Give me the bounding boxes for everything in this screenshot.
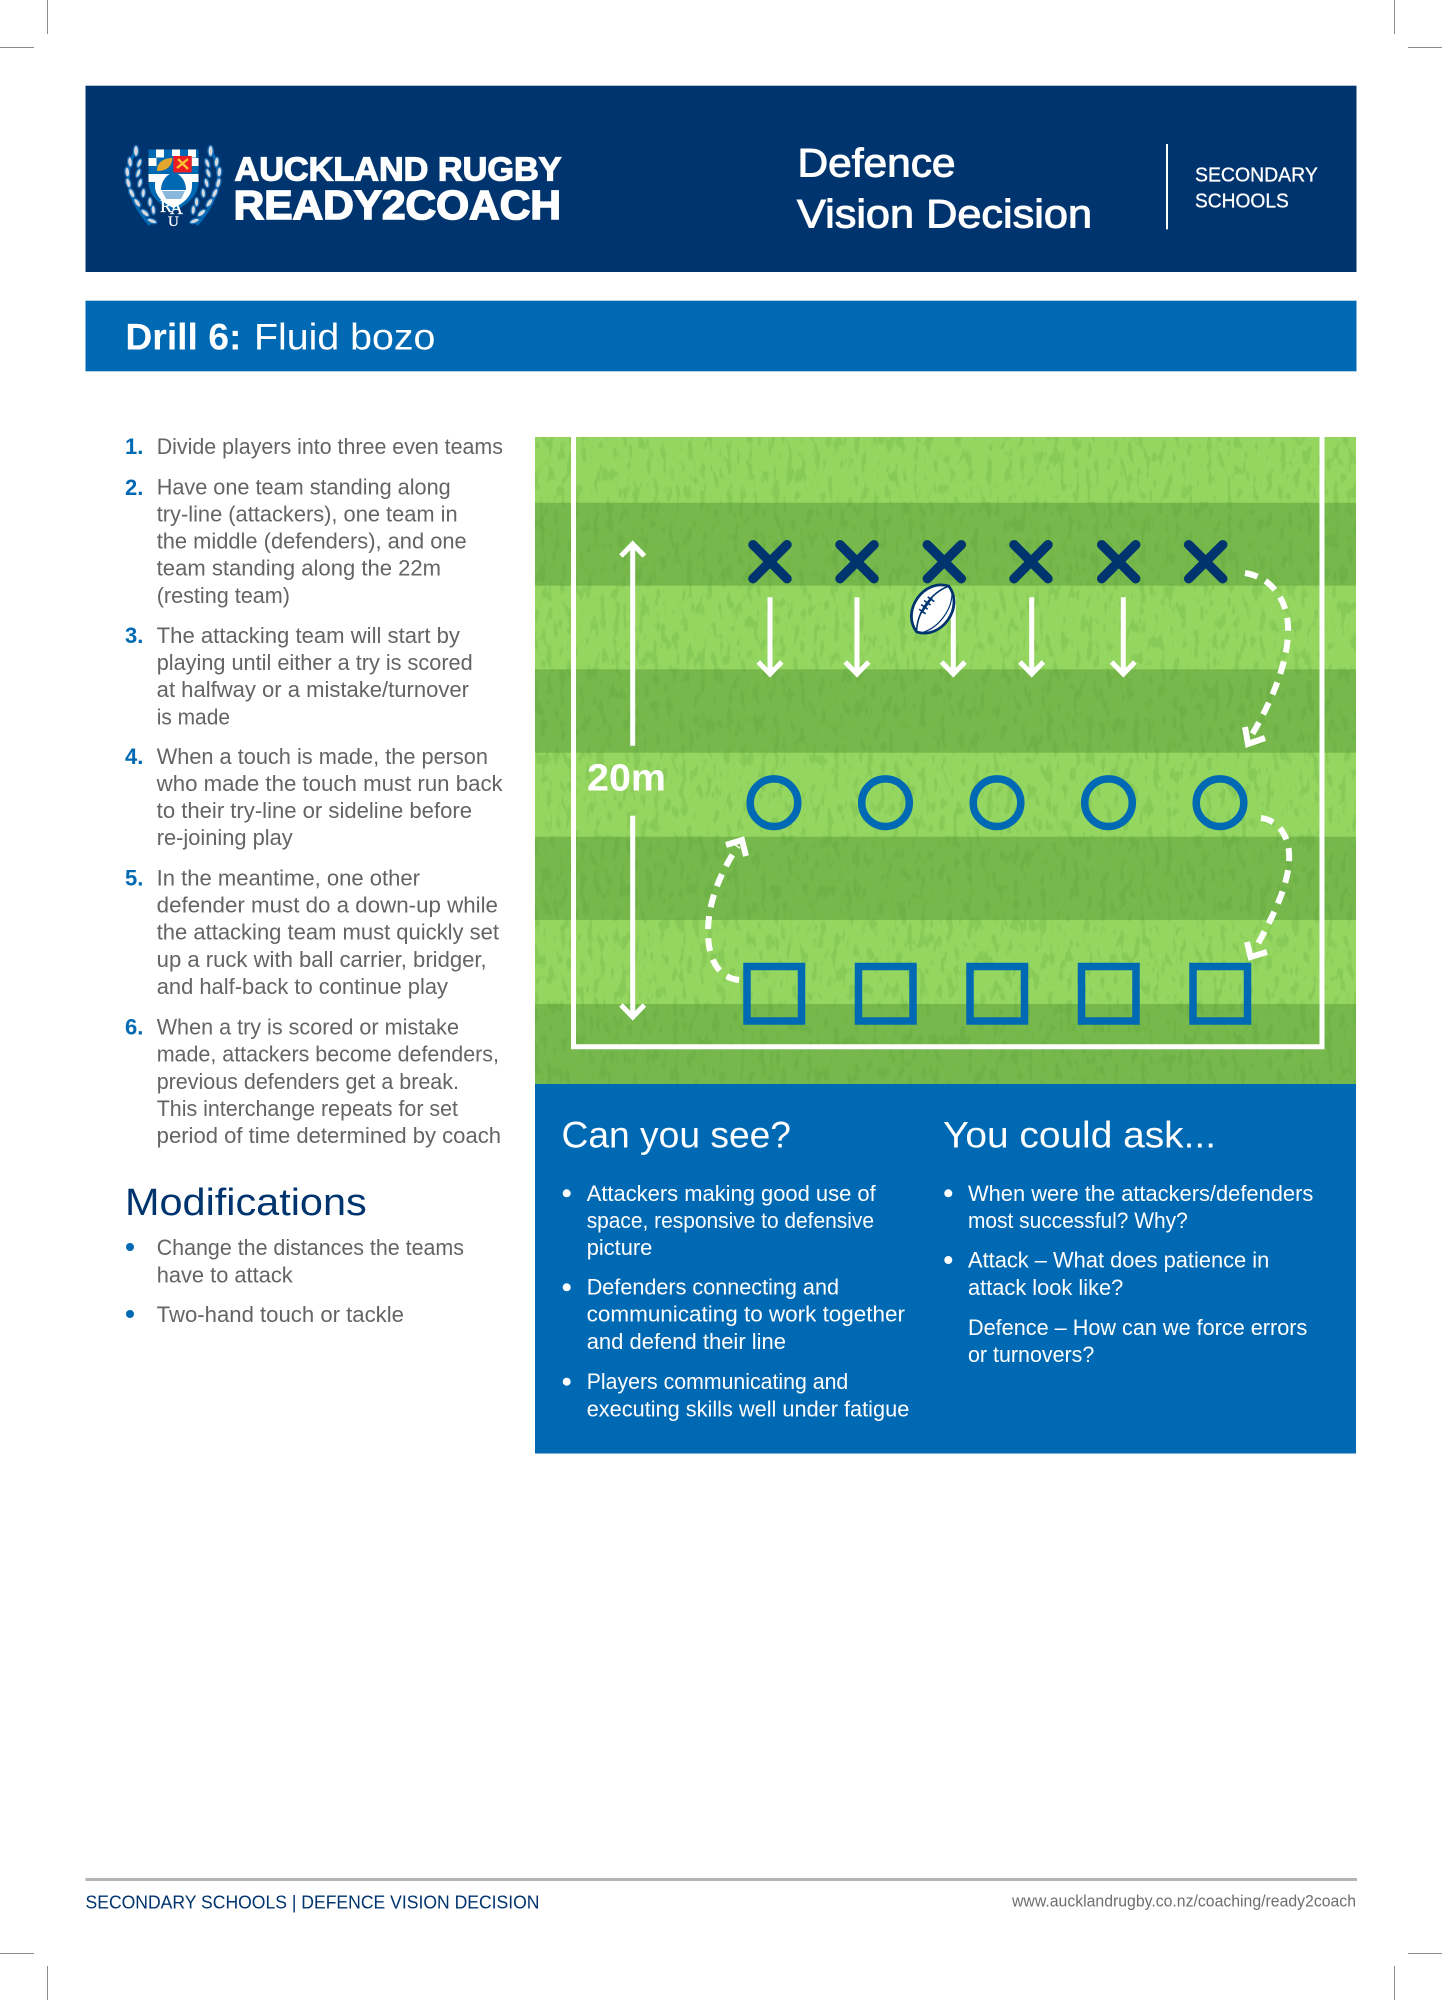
step 4 (125, 744, 504, 850)
question 2: attack look like? (968, 1275, 1123, 1300)
grass stripes (535, 437, 1356, 1084)
panel: questions (535, 1084, 1356, 1454)
step 2: team standing along the 22m (157, 556, 441, 580)
header banner (86, 86, 1356, 272)
step 1: Divide players into three even teams (157, 434, 503, 459)
modification 1 (126, 1235, 464, 1288)
step 5: defender must do a down-up while (157, 892, 498, 918)
step 3: The attacking team will start by (157, 623, 460, 648)
you could ask heading: You could ask... (943, 1114, 1216, 1155)
point 2: communicating to work together (587, 1302, 905, 1326)
point 1: space, responsive to defensive (587, 1208, 874, 1233)
modifications section (125, 1182, 464, 1327)
step 6: previous defenders get a break. (157, 1069, 459, 1094)
title: Defence Vision Decision: Vision Decision (797, 192, 1092, 236)
header divider (1166, 144, 1168, 229)
question 1: most successful? Why? (968, 1208, 1188, 1233)
question 2 (944, 1248, 1269, 1300)
step 4: When a touch is made, the person (157, 744, 488, 769)
column: you could ask (943, 1114, 1313, 1367)
question 3: Defence – How can we force errors (968, 1315, 1307, 1340)
step 2: the middle (defenders), and one (157, 528, 467, 554)
can you see heading: Can you see? (562, 1114, 791, 1155)
step 3 (125, 623, 473, 730)
dashed rotation arrow: resting to defenders (708, 840, 746, 980)
step 6: made, attackers become defenders, (157, 1042, 499, 1066)
logo wordmark: READY2COACH (234, 182, 561, 228)
step 6: This interchange repeats for set (157, 1096, 458, 1121)
step 6: When a try is scored or mistake (157, 1014, 459, 1040)
logo wordmark: AUCKLAND RUGBY (234, 151, 562, 188)
step 2: Have one team standing along (157, 474, 451, 500)
step 5: the attacking team must quickly set (157, 920, 499, 944)
point 3: Players communicating and (587, 1369, 848, 1394)
point 3 (563, 1369, 909, 1422)
step 5: 5. (125, 866, 143, 890)
icon: rugby ball (901, 575, 964, 643)
point 2: and defend their line (587, 1329, 786, 1354)
step 3: 3. (125, 623, 143, 648)
step 2: (resting team) (157, 583, 290, 608)
20m measure arrow: 20m (587, 758, 666, 800)
step 2: try-line (attackers), one team in (157, 502, 458, 526)
step 3: is made (157, 704, 230, 730)
step 6: period of time determined by coach (157, 1123, 501, 1148)
modifications heading: Modifications (125, 1182, 367, 1224)
point 2: Defenders connecting and (587, 1274, 839, 1300)
modification 2: Two-hand touch or tackle (157, 1302, 404, 1327)
step 3: playing until either a try is scored (157, 650, 473, 675)
step 5: up a ruck with ball carrier, bridger, (157, 947, 487, 972)
label: secondary schools: SCHOOLS (1195, 190, 1289, 212)
modification 1: have to attack (157, 1262, 294, 1288)
attackers: crosses (753, 545, 1223, 579)
step 4: who made the touch must run back (156, 771, 504, 796)
resting team: squares (747, 966, 1248, 1021)
drill heading: Drill 6: (125, 316, 241, 357)
footer label: SECONDARY SCHOOLS | DEFENCE VISION DECISION (86, 1891, 540, 1912)
modification 1: Change the distances the teams (157, 1235, 464, 1260)
question 3: or turnovers? (968, 1342, 1094, 1367)
crest monogram (160, 196, 183, 230)
footer url: www.aucklandrugby.co.nz/coaching/ready2coach (1011, 1893, 1356, 1911)
point 1 (563, 1181, 877, 1260)
step 5 (125, 866, 499, 999)
attack direction arrows (758, 597, 1135, 675)
question 1: When were the attackers/defenders (968, 1181, 1313, 1206)
question 2: Attack – What does patience in (968, 1248, 1269, 1272)
step 6 (125, 1014, 501, 1148)
crest monogram: A (170, 198, 183, 218)
dashed rotation arrow: attackers to defenders (1245, 573, 1288, 744)
drill heading (125, 316, 435, 357)
point 2 (563, 1274, 905, 1354)
footer (86, 1878, 1357, 1912)
point 1: Attackers making good use of (587, 1181, 877, 1206)
step 2: 2. (125, 475, 143, 500)
step 4: to their try-line or sideline before (157, 798, 472, 823)
question 1 (944, 1181, 1313, 1233)
numbered instructions (125, 434, 504, 1148)
crest monogram: U (168, 214, 179, 230)
step 3: at halfway or a mistake/turnover (157, 677, 469, 702)
column: can you see (562, 1114, 909, 1422)
title: Defence Vision Decision (797, 142, 1092, 236)
crest monogram: R (160, 196, 172, 216)
step 5: In the meantime, one other (157, 866, 420, 890)
step 4: 4. (125, 744, 143, 769)
drill diagram: rugby field (535, 437, 1356, 1084)
20m measure arrow (587, 543, 666, 1018)
step 4: re-joining play (157, 825, 293, 850)
step 5: and half-back to continue play (157, 974, 448, 999)
logo wordmark (234, 151, 562, 228)
dashed rotation arrow: defenders to resting (1247, 818, 1289, 957)
field lines (574, 437, 1322, 1047)
label: secondary schools: SECONDARY (1195, 165, 1318, 187)
icon: Auckland Rugby crest (124, 146, 222, 230)
step 6: 6. (125, 1014, 143, 1040)
defenders: circles (750, 779, 1244, 826)
title: Defence Vision Decision: Defence (798, 142, 956, 186)
drill heading: Fluid bozo (254, 316, 435, 357)
point 3: executing skills well under fatigue (587, 1396, 909, 1422)
question 3 (968, 1315, 1307, 1367)
step 1: 1. (125, 434, 143, 459)
label: secondary schools (1195, 165, 1318, 212)
step 2 (125, 474, 467, 608)
drill title bar (86, 301, 1356, 371)
point 1: picture (587, 1235, 652, 1260)
